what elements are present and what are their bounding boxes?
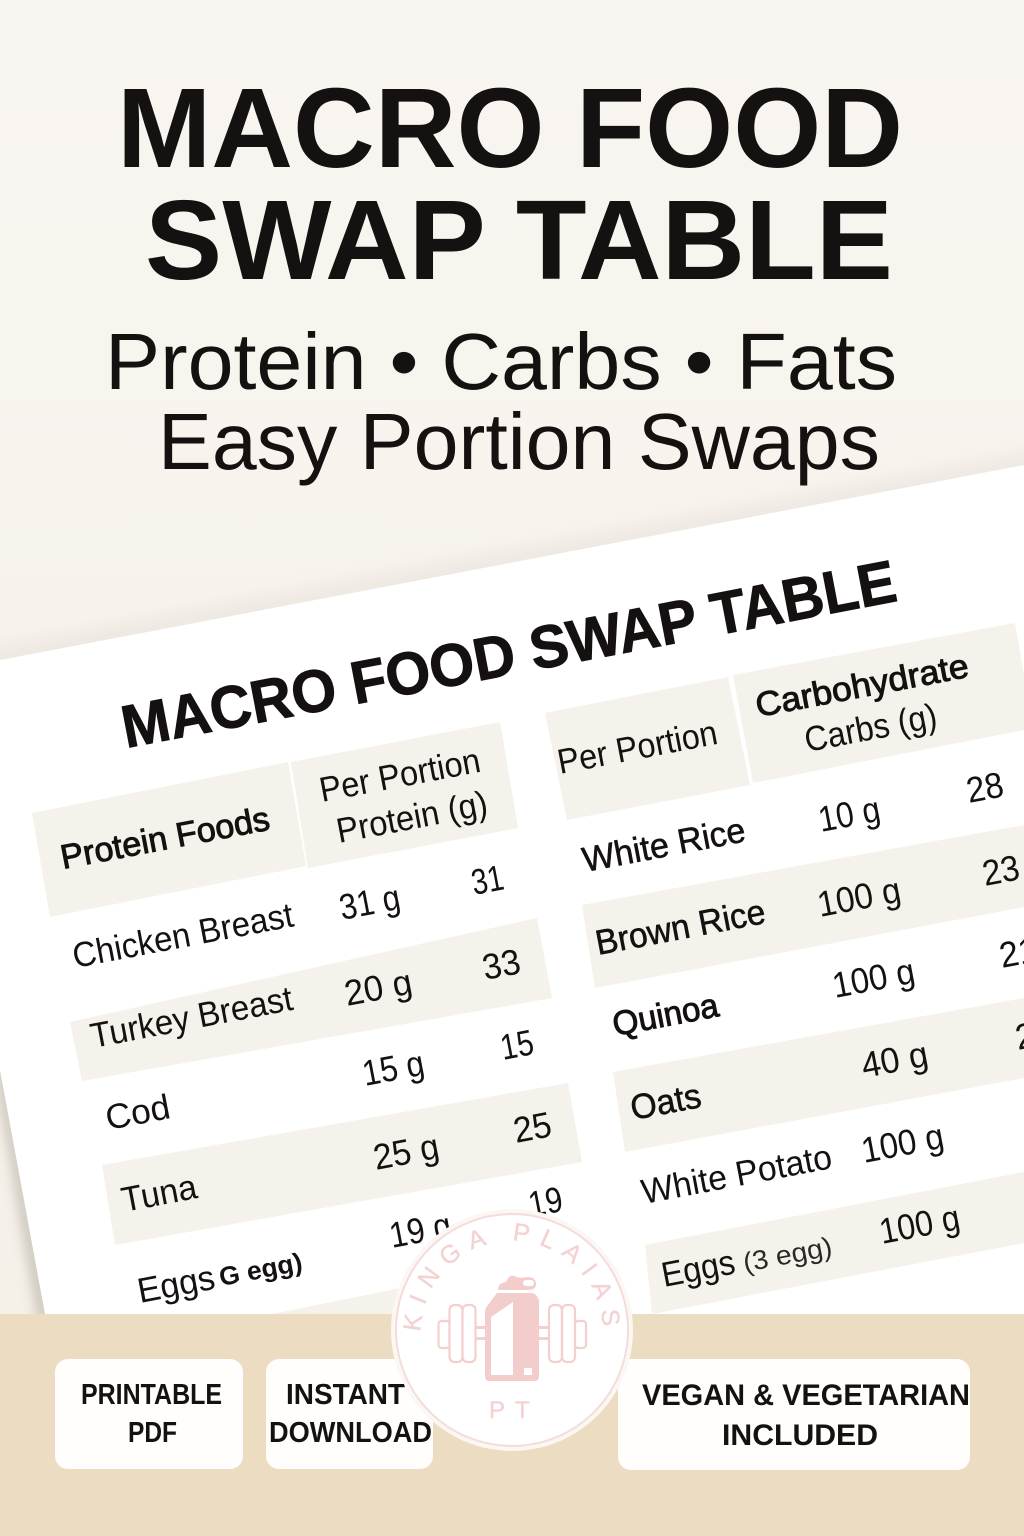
row: white rice: 10 g — [815, 788, 883, 840]
row: brown rice — [582, 825, 1024, 988]
row: tuna: 25 g — [370, 1125, 442, 1178]
row: eggs 3 egg — [645, 1172, 1024, 1314]
logo arc text: KINGA PLAIAS — [403, 1223, 620, 1330]
row: cod: Cod — [102, 1087, 173, 1138]
row: oats: Oats — [627, 1076, 704, 1128]
row: tuna: 25 — [510, 1103, 555, 1151]
row: turkey breast: 33 — [479, 940, 524, 988]
row: quinoa — [614, 939, 1024, 1040]
row: white potato: 100 g — [858, 1115, 947, 1171]
badge: instant download — [266, 1359, 433, 1469]
row: chicken breast — [69, 857, 507, 976]
table: carbohydrate foods — [545, 623, 1024, 1314]
row: chicken breast: Chicken Breast — [69, 896, 297, 976]
sheet shadow — [0, 450, 1024, 1320]
title — [117, 65, 903, 303]
row: cod: 15 — [497, 1021, 537, 1068]
row: cod — [102, 1021, 537, 1138]
badge: vegan and vegetarian — [618, 1359, 970, 1470]
icon: dumbbell with bottle — [438, 1276, 586, 1381]
row: eggs 3 egg: Eggs — [658, 1243, 738, 1295]
carb header cells: Per Portion — [554, 713, 721, 782]
logo bottom text: PT — [489, 1397, 540, 1424]
carb header cells: Carbohydrate — [752, 647, 972, 725]
row: turkey breast: Turkey Breast — [87, 979, 296, 1056]
row: white rice — [580, 772, 1003, 871]
row: turkey breast — [70, 918, 552, 1081]
sheet heading: MACRO FOOD SWAP TABLE — [116, 547, 901, 761]
row: white potato: White Potato — [638, 1137, 835, 1212]
row: eggs 3 egg: 100 g — [876, 1196, 963, 1252]
row: eggs: 19 — [525, 1178, 566, 1225]
title: MACRO FOOD — [117, 65, 903, 191]
row: white rice: 28 — [963, 764, 1007, 811]
carb header cells — [545, 623, 1024, 820]
subtitle: Protein • Carbs • Fats — [105, 317, 897, 406]
row: chicken breast: 31 g — [336, 876, 403, 928]
row: white potato — [640, 1129, 944, 1203]
row: tuna: Tuna — [118, 1167, 201, 1220]
carb header cells: Carbs (g) — [801, 696, 940, 760]
badge: printable pdf: PRINTABLE — [81, 1379, 222, 1411]
table: protein foods — [32, 722, 582, 1314]
partial band below eggs — [272, 1270, 500, 1314]
title: SWAP TABLE — [145, 177, 893, 303]
panel: tilted table sheet — [0, 465, 1024, 1314]
row: cod: 15 g — [359, 1042, 427, 1094]
subtitle: Easy Portion Swaps — [158, 397, 880, 486]
badge: printable pdf — [55, 1359, 243, 1469]
row: brown rice: 100 g — [814, 869, 904, 925]
badge: vegan and vegetarian: INCLUDED — [722, 1419, 878, 1452]
logo: kinga plaias pt — [391, 1209, 633, 1451]
row: eggs: 19 g — [386, 1204, 454, 1256]
protein header cells — [32, 722, 518, 917]
row: eggs 3 egg: (3 egg) — [741, 1232, 835, 1278]
row: eggs — [134, 1178, 566, 1311]
protein header cells: Protein Foods — [57, 800, 273, 877]
row: oats: 40 g — [858, 1033, 931, 1086]
row: turkey breast: 20 g — [341, 961, 415, 1014]
protein header cells: Protein (g) — [333, 784, 491, 851]
row: chicken breast: 31 — [468, 857, 507, 903]
row: brown rice: Brown Rice — [592, 892, 768, 963]
row: quinoa: Quinoa — [609, 986, 722, 1044]
row: quinoa: 100 g — [829, 950, 918, 1006]
row: eggs: Eggs — [134, 1258, 218, 1311]
badge: instant download: DOWNLOAD — [269, 1417, 432, 1449]
subtitle — [105, 317, 897, 486]
row: oats — [613, 998, 1024, 1152]
badge: vegan and vegetarian: VEGAN & VEGETARIAN — [642, 1379, 970, 1412]
badge: instant download: INSTANT — [286, 1379, 405, 1411]
protein header cells: Per Portion — [316, 741, 484, 810]
row: white rice: White Rice — [579, 811, 749, 880]
row: tuna — [102, 1083, 582, 1245]
row: eggs: G egg) — [217, 1247, 305, 1292]
badge: printable pdf: PDF — [128, 1417, 177, 1449]
footer band — [0, 1314, 1024, 1536]
